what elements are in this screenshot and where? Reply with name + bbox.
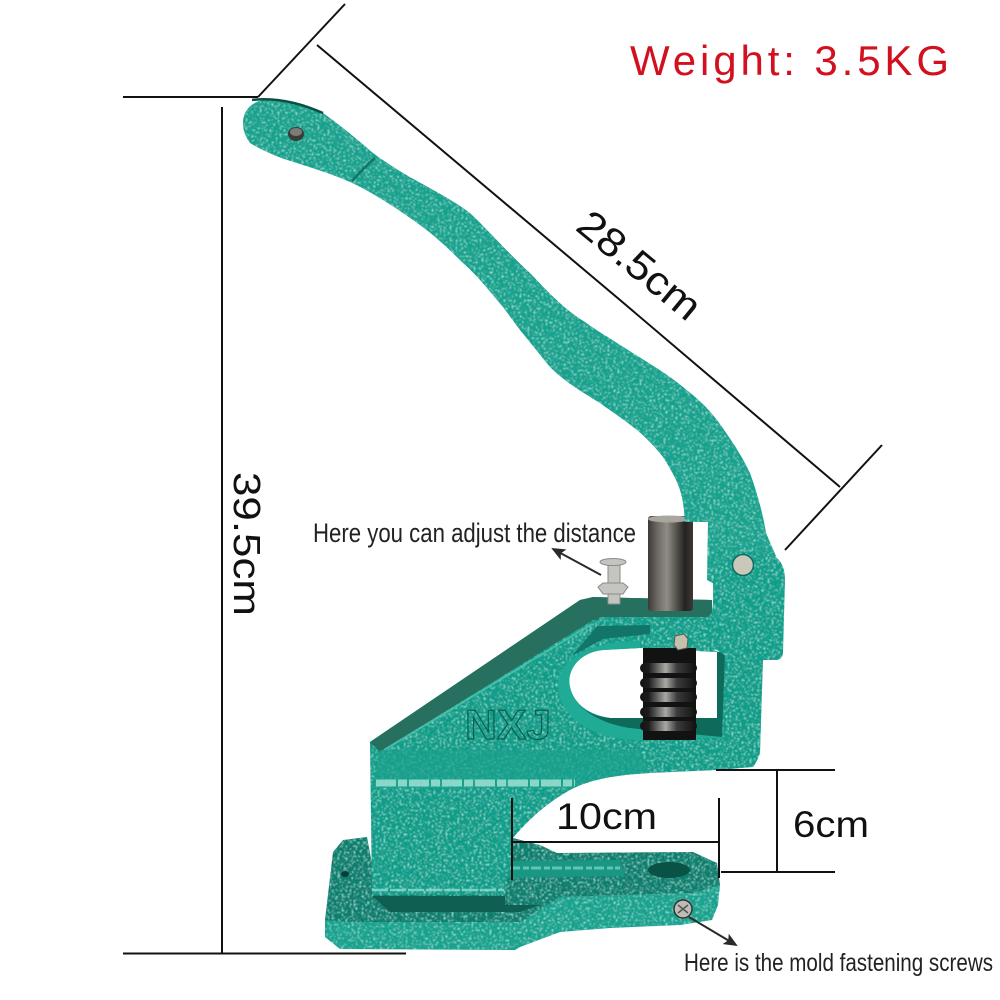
jaw ridge [503, 860, 625, 878]
body bright band [376, 780, 575, 786]
body shelf [372, 750, 650, 788]
base holes [341, 871, 510, 910]
arm screw [674, 634, 688, 650]
hole inner floor [578, 652, 725, 737]
arrow from mold screw [689, 917, 736, 945]
pivot rivet [732, 554, 754, 576]
arrow to adjustment pin [553, 549, 601, 575]
height label: 39.5cm [225, 472, 267, 616]
overall height dimension [123, 97, 406, 954]
mold fastening screw [674, 900, 692, 918]
sloped top surface [370, 597, 712, 752]
handle [243, 99, 776, 590]
steel plunger rod [648, 516, 693, 611]
throat height label: 6cm [793, 804, 869, 845]
jaw hole [648, 862, 690, 878]
jaw ridge highlight [510, 866, 620, 870]
throat height dimension [716, 770, 835, 872]
hole rim [558, 641, 725, 740]
spring [640, 648, 697, 740]
pivot plate and arm [598, 552, 785, 660]
handle shadow [252, 99, 323, 113]
jaw depth dimension [512, 798, 719, 880]
adjustment pin [598, 558, 628, 604]
frame body [370, 597, 763, 895]
handle length dimension [258, 4, 882, 550]
arm recess [572, 625, 650, 656]
sloped rib highlight [384, 624, 592, 750]
handle length label: 28.5cm [568, 202, 710, 329]
body lower highlight [372, 889, 504, 891]
base top surface and jaw [325, 837, 720, 922]
handle hole [288, 127, 304, 141]
body shadow [372, 896, 540, 912]
press machine [243, 99, 785, 950]
handle crease [352, 158, 375, 181]
embossed NXJ logo: NXJ [465, 701, 551, 748]
jaw depth label: 10cm [556, 796, 657, 837]
adjust distance callout: Here you can adjust the distance [313, 518, 636, 548]
base side face [325, 885, 720, 950]
weight label: Weight: 3.5KG [630, 37, 949, 84]
